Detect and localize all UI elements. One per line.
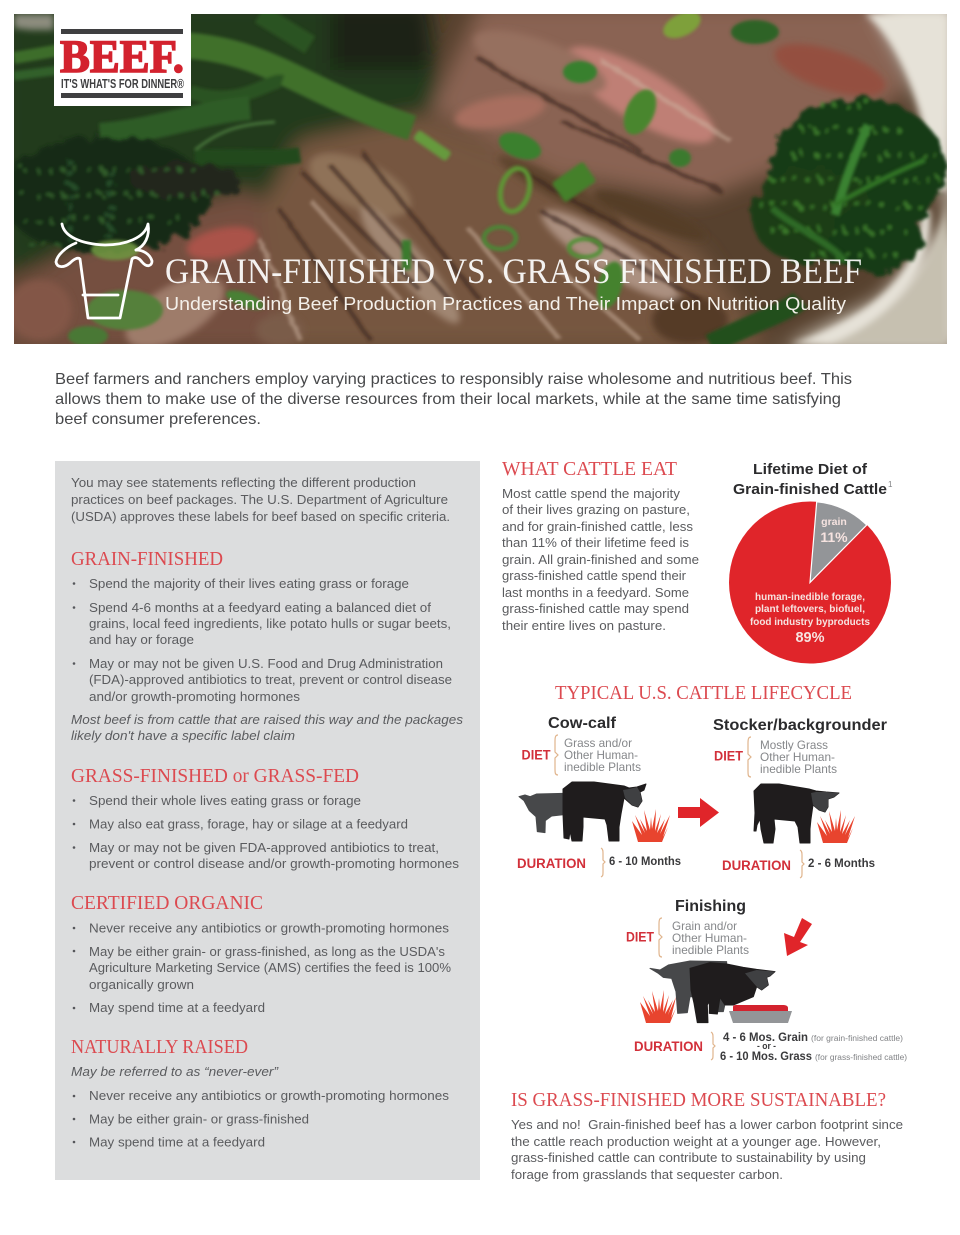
list: certified organic: May spend time at a feedyard: [89, 1000, 265, 1015]
duration: finishing: 4 - 6 Mos. Grain: [723, 1030, 808, 1044]
list: grain-finished: grains, local feed ingredients, like potato hulls or sugar beets,: [89, 616, 451, 631]
intro paragraph: allows them to make use of the diverse resources from their local markets, while at the same time satisfying: [55, 391, 841, 408]
pie label: grain: grain: [821, 516, 847, 528]
heading: what cattle eat: WHAT CATTLE EAT: [502, 458, 677, 480]
arrow: cow-calf to stocker: [678, 798, 719, 827]
stage: finishing: Grain and/or: [672, 919, 737, 933]
duration: cow-calf: [517, 848, 681, 877]
icon: steer: [754, 784, 839, 843]
chart title: lifetime diet: [733, 461, 893, 498]
list: grass-finished: May or may not be given FDA-approved antibiotics to treat,: [89, 840, 439, 855]
stage: finishing: [626, 898, 907, 1063]
list: certified organic: Agriculture Marketing Service (AMS) certifies the feed is 100%: [89, 960, 451, 975]
heading: sustainability: IS GRASS-FINISHED MORE SUSTAINABLE?: [511, 1089, 886, 1111]
text block: what cattle eat: and for grain-finished cattle, less: [502, 519, 694, 534]
italic note: Most beef is from cattle that are raised this way and the packages: [71, 712, 464, 727]
panel intro text: You may see statements reflecting the different production: [71, 475, 416, 490]
heading: naturally raised: NATURALLY RAISED: [71, 1036, 248, 1058]
icon: grass: [817, 810, 855, 843]
icon: cow head outline: [56, 224, 152, 318]
text block: what cattle eat: of their lives grazing on pasture,: [502, 502, 690, 517]
stage: finishing: inedible Plants: [672, 943, 749, 957]
panel: label definitions: [55, 461, 480, 1180]
list: grain-finished: (FDA)-approved antibiotics to treat, prevent or control disease: [89, 672, 452, 687]
text block: what cattle eat: Most cattle spend the majority: [502, 486, 680, 501]
stage: stocker/backgrounder: DIET: [714, 748, 744, 764]
icon: grass: [640, 990, 676, 1023]
text block: what cattle eat: than 11% of their lifetime feed is: [502, 535, 690, 550]
intro paragraph: [55, 371, 852, 428]
stage: stocker/backgrounder: Mostly Grass: [760, 738, 828, 752]
icon: black cow: [690, 963, 775, 1023]
heading: certified organic: CERTIFIED ORGANIC: [71, 892, 263, 914]
chart title: lifetime diet: Grain-finished Cattle: [733, 481, 887, 498]
duration: stocker: [722, 850, 875, 878]
text block: sustainability: [511, 1117, 903, 1182]
hero photo: sliced steak and broccolini: [14, 14, 947, 344]
icon: grey cow: [650, 961, 727, 1013]
icon: feed trough: [729, 1005, 792, 1023]
text block: what cattle eat: grass-finished cattle spend their: [502, 568, 687, 583]
list: grain-finished: [73, 576, 452, 704]
list: grain-finished: Spend 4-6 months at a feedyard eating a balanced diet of: [89, 600, 431, 615]
list: grass-finished: prevent or control disease and/or growth-promoting hormones: [89, 856, 460, 871]
stage: cow-calf: inedible Plants: [564, 760, 641, 774]
list: grain-finished: and/or growth-promoting hormones: [89, 689, 301, 704]
hero title: GRAIN-FINISHED VS. GRASS FINISHED BEEF: [165, 251, 862, 291]
pie label: forage and byproducts: plant leftovers, biofuel,: [755, 603, 865, 615]
pie label: forage and byproducts: [750, 591, 870, 646]
duration: finishing: DURATION: [634, 1039, 703, 1054]
duration: finishing: 6 - 10 Mos. Grass: [720, 1049, 812, 1063]
stage: stocker/backgrounder: inedible Plants: [760, 762, 837, 776]
list: certified organic: [73, 920, 451, 1015]
heading: grass-finished or grass-fed: GRASS-FINISHED or GRASS-FED: [71, 765, 359, 787]
list: certified organic: organically grown: [89, 977, 194, 992]
duration: stocker: 2 - 6 Months: [808, 856, 875, 870]
pie label: grain: [820, 516, 848, 545]
chart title: lifetime diet: 1: [888, 480, 893, 489]
text block: what cattle eat: grass-finished cattle may spend: [502, 601, 689, 616]
intro paragraph: beef consumer preferences.: [55, 411, 261, 428]
pie label: forage and byproducts: 89%: [795, 630, 825, 646]
list: naturally raised: Never receive any antibiotics or growth-promoting hormones: [89, 1088, 450, 1103]
duration: finishing: - or -: [757, 1041, 776, 1051]
list: naturally raised: May be referred to as “never-ever”: [71, 1064, 279, 1079]
list: certified organic: Never receive any antibiotics or growth-promoting hormones: [89, 920, 450, 936]
icon: cow: [563, 782, 646, 841]
duration: cow-calf: 6 - 10 Months: [609, 854, 681, 868]
logo: BEEF It's What's For Dinner: BEEF.: [60, 31, 184, 83]
list: naturally raised: [71, 1064, 450, 1150]
stage: stocker/backgrounder: Other Human-: [760, 750, 835, 764]
panel intro text: practices on beef packages. The U.S. Department of Agriculture: [71, 492, 448, 507]
stage: cow-calf: DIET: [522, 748, 551, 762]
list: grass-finished: May also eat grass, forage, hay or silage at a feedyard: [89, 816, 408, 832]
list: grass-finished: [73, 793, 460, 871]
panel intro text: [71, 475, 450, 524]
pie chart: lifetime diet: [729, 502, 891, 664]
stage: cow-calf: Grass and/or: [564, 736, 632, 750]
logo: BEEF It's What's For Dinner: IT'S WHAT'S FOR DINNER®: [61, 77, 185, 91]
heading: typical lifecycle: TYPICAL U.S. CATTLE LIFECYCLE: [555, 682, 852, 704]
pie label: grain: 11%: [820, 529, 848, 545]
text block: sustainability: the cattle reach production weight at a younger age. However,: [511, 1134, 881, 1149]
icon: grass: [632, 809, 670, 842]
arrow: stocker to finishing: [784, 918, 812, 956]
panel intro text: (USDA) approves these labels for beef based on specific criteria.: [71, 509, 450, 524]
hero subtitle: Understanding Beef Production Practices and Their Impact on Nutrition Quality: [165, 294, 846, 314]
stage: stocker/backgrounder: [713, 717, 887, 878]
italic note: [71, 712, 464, 743]
chart title: lifetime diet: Lifetime Diet of: [753, 461, 868, 478]
italic note: likely don't have a specific label claim: [71, 728, 295, 743]
list: grain-finished: and hay or forage: [89, 632, 194, 647]
stage: stocker/backgrounder: Stocker/backgrounder: [713, 717, 887, 734]
stage: finishing: DIET: [626, 930, 655, 944]
duration: stocker: DURATION: [722, 858, 791, 873]
pie label: forage and byproducts: human-inedible forage,: [755, 591, 865, 603]
text block: what cattle eat: [502, 486, 699, 633]
list: certified organic: May be either grain- or grass-finished, as long as the USDA's: [89, 944, 446, 959]
stage: cow-calf: Other Human-: [564, 748, 638, 762]
text block: what cattle eat: their entire lives on pasture.: [502, 618, 666, 633]
stage: finishing: Finishing: [675, 898, 746, 915]
intro paragraph: Beef farmers and ranchers employ varying practices to responsibly raise wholesome and nutritious beef. This: [55, 371, 852, 388]
duration: finishing: (for grass-finished cattle): [815, 1053, 907, 1062]
text block: sustainability: Yes and no! Grain-finished beef has a lower carbon footprint since: [511, 1117, 903, 1132]
text block: what cattle eat: grain. All grain-finished and some: [502, 552, 699, 567]
list: grain-finished: Spend the majority of their lives eating grass or forage: [89, 576, 409, 591]
pie label: forage and byproducts: food industry byproducts: [750, 616, 870, 628]
text block: sustainability: grass-finished cattle can contribute to sustainability by using: [511, 1150, 866, 1165]
duration: finishing: [634, 1030, 907, 1063]
duration: cow-calf: DURATION: [517, 856, 586, 871]
text block: sustainability: forage from grasslands that sequester carbon.: [511, 1167, 783, 1182]
stage: cow-calf: [517, 715, 681, 877]
stage: finishing: Other Human-: [672, 931, 747, 945]
list: grass-finished: Spend their whole lives eating grass or forage: [89, 793, 361, 808]
heading: grain-finished: GRAIN-FINISHED: [71, 548, 223, 570]
logo: BEEF It's What's For Dinner: [54, 14, 191, 106]
list: naturally raised: May spend time at a feedyard: [89, 1134, 265, 1150]
list: naturally raised: May be either grain- or grass-finished: [89, 1112, 309, 1126]
stage: cow-calf: Cow-calf: [548, 715, 617, 732]
text block: what cattle eat: last months in a feedyard. Some: [502, 585, 689, 600]
duration: finishing: (for grain-finished cattle): [811, 1034, 903, 1043]
icon: calf: [519, 793, 564, 833]
list: grain-finished: May or may not be given U.S. Food and Drug Administration: [89, 656, 443, 671]
